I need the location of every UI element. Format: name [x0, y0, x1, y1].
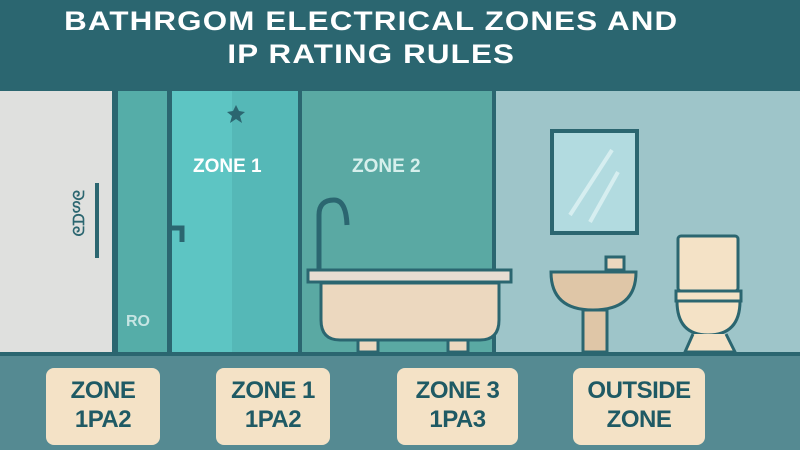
card: zone 3: ZONE 3 — [416, 377, 499, 404]
bath — [308, 270, 511, 352]
card: outside zone: ZONE — [607, 406, 671, 433]
card: zone — [46, 368, 160, 445]
card: zone 1: ZONE 1 — [231, 377, 315, 404]
icon: star — [227, 105, 245, 123]
title — [64, 6, 678, 69]
wall sign: ᘐᔕᗭᘐ — [69, 190, 86, 237]
card: zone 1: 1PA2 — [245, 406, 301, 433]
wall sign — [69, 183, 99, 258]
card: outside zone: OUTSIDE — [587, 377, 691, 404]
shower handle — [172, 228, 182, 242]
title: IP RATING RULES — [227, 39, 515, 69]
icon: tap — [319, 200, 347, 272]
header — [0, 0, 800, 88]
title: BATHRGOM ELECTRICAL ZONES AND — [64, 6, 678, 36]
zone 1 label: ZONE 1 — [193, 156, 262, 177]
card: outside zone — [573, 368, 705, 445]
toilet — [676, 236, 741, 352]
card: zone: ZONE — [71, 377, 135, 404]
mirror — [552, 131, 637, 233]
zone 2 label: ZONE 2 — [352, 156, 421, 177]
card: zone 1 — [216, 368, 330, 445]
zone 0 label: RO — [126, 313, 150, 330]
bathroom scene — [0, 88, 800, 356]
card: zone 3: 1PA3 — [429, 406, 486, 433]
card: zone 3 — [397, 368, 518, 445]
sink — [551, 257, 636, 352]
card: zone: 1PA2 — [75, 406, 131, 433]
